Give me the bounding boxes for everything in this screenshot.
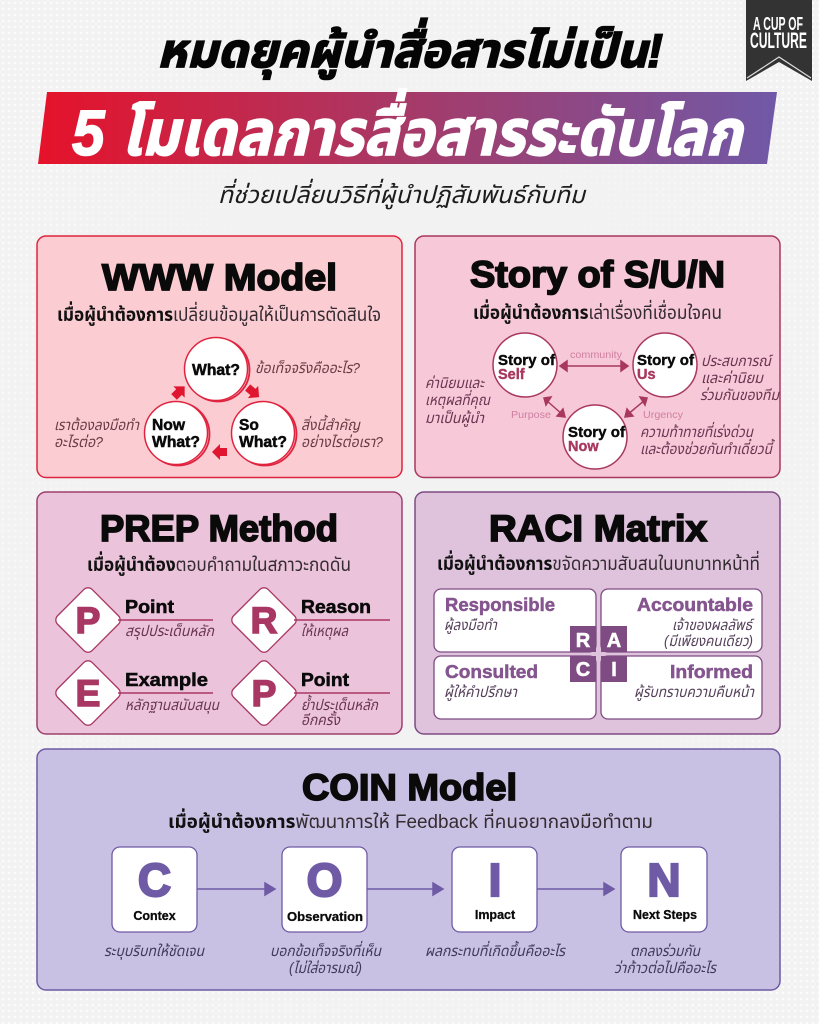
caption: observation: บอกข้อเท็จจริงที่เห็น (270, 940, 382, 960)
circle: Story of Now (563, 405, 627, 469)
caption: self (425, 375, 491, 427)
arrow: So What to Now What (212, 444, 227, 460)
caption: now what: อะไรต่อ? (54, 434, 104, 451)
RACI letter tiles (570, 626, 627, 682)
caption: observation (270, 940, 382, 977)
subheading: เมื่อผู้นำต้องตอบคำถามในสภาวะกดดัน (87, 551, 351, 576)
item: Point: P (76, 600, 100, 641)
caption: now what: เราต้องลงมือทำ (54, 417, 140, 434)
RACI letter tiles: I (611, 659, 617, 681)
arrow: I to N (537, 883, 614, 895)
item: Point again: ย้ำประเด็นหลัก (301, 694, 379, 714)
caption: now: และต้องช่วยกันทำเดี๋ยวนี้ (640, 438, 776, 458)
item: Point: สรุปประเด็นหลัก (125, 623, 215, 640)
heading: RACI Matrix: RACI Matrix (489, 508, 707, 549)
card: Impact: Impact (475, 908, 516, 922)
caption: us: ร่วมกันของทีม (700, 387, 781, 404)
caption: impact: ผลกระทบที่เกิดขึ้นคืออะไร (425, 940, 567, 960)
item: Reason (229, 585, 390, 655)
circle: Now What? (144, 402, 210, 466)
circle: So What?: What? (239, 434, 287, 451)
card: Impact: I (489, 854, 501, 906)
heading: PREP Method: PREP Method (100, 508, 338, 549)
box: Informed: Informed (670, 662, 753, 682)
subtitle: ที่ช่วยเปลี่ยนวิธีที่ผู้นำปฏิสัมพันธ์กับทีม (218, 178, 587, 210)
RACI letter tiles: A (607, 630, 621, 652)
item: Reason: R (251, 600, 277, 641)
caption: self: เหตุผลที่คุณ (425, 389, 491, 409)
subheading: เมื่อผู้นำต้องการขจัดความสับสนในบทบาทหน้าที่ (437, 550, 760, 575)
caption: next steps: ตกลงร่วมกัน (630, 943, 701, 960)
subheading: เมื่อผู้นำต้องการเล่าเรื่องที่เชื่อมใจคน (473, 299, 722, 324)
label: Purpose: Purpose (511, 409, 551, 421)
caption: now (640, 421, 776, 458)
circle: Now What?: Now (152, 417, 186, 434)
item: Reason: ให้เหตุผล (301, 623, 348, 640)
box: Responsible (434, 589, 596, 652)
card: Observation (282, 847, 367, 932)
subheading: เมื่อผู้นำต้องการเปลี่ยนข้อมูลให้เป็นการตัดสินใจ (57, 301, 381, 327)
box: Accountable: เจ้าของผลลัพธ์ (672, 617, 755, 634)
box: Informed: ผู้รับทราบความคืบหน้า (634, 684, 755, 701)
circle: Story of Self: Self (498, 367, 525, 383)
caption: us: ประสบการณ์ (701, 353, 774, 370)
caption: self: มาเป็นผู้นำ (425, 410, 485, 427)
circle: Story of Us: Us (637, 367, 656, 383)
arrow: Now What to What (168, 381, 190, 403)
arrow: urgency (625, 397, 647, 417)
circle: Story of Us (633, 333, 697, 397)
box: Consulted (434, 656, 596, 719)
label: community: community (570, 349, 623, 361)
panel: COIN Model (37, 749, 780, 990)
item: Point: Point (125, 597, 174, 617)
caption: so what (301, 414, 384, 451)
caption: what: ข้อเท็จจริงคืออะไร? (255, 360, 361, 377)
arrow: What to So What (242, 381, 264, 403)
item: Example (53, 658, 220, 728)
arrow: community (560, 361, 628, 371)
box: Responsible: Responsible (445, 595, 555, 615)
arrow: O to I (367, 883, 443, 895)
heading: COIN Model: COIN Model (302, 767, 517, 808)
arrow: purpose (544, 397, 565, 417)
caption: so what: อย่างไรต่อเรา? (301, 434, 384, 451)
caption: self: ค่านิยมและ (425, 375, 486, 392)
item: Reason: Reason (301, 597, 371, 617)
caption: us: และค่านิยม (701, 370, 765, 387)
item: Point (53, 585, 215, 655)
panel: Story of S/U/N (415, 236, 781, 478)
circle: What?: What? (192, 362, 240, 379)
circle: Story of Self (493, 333, 557, 397)
title: หมดยุคผู้นำสื่อสารไม่เป็น! (157, 18, 663, 80)
RACI letter tiles: R (576, 630, 591, 652)
caption: next steps: ว่าก้าวต่อไปคืออะไร (614, 960, 718, 977)
circle: Story of Us: Story of (637, 353, 694, 369)
item: Point again: อีกครั้ง (301, 710, 341, 729)
caption: observation: (ไม่ใส่อารมณ์) (289, 960, 362, 977)
card: Next Steps: Next Steps (633, 908, 697, 922)
item: Example: E (76, 673, 100, 714)
box: Accountable: (มีเพียงคนเดียว) (664, 633, 753, 650)
box: Consulted: Consulted (445, 662, 538, 682)
caption: so what: สิ่งนี้สำคัญ (301, 414, 361, 434)
card: Observation: O (307, 854, 342, 906)
circle: So What?: So (239, 417, 259, 434)
box: Consulted: ผู้ให้คำปรึกษา (444, 684, 518, 701)
caption: context: ระบุบริบทให้ชัดเจน (104, 943, 205, 960)
caption: next steps (614, 943, 718, 977)
card: Impact (452, 847, 537, 932)
item: Example: Example (125, 670, 208, 690)
caption: now: ความท้าทายที่เร่งด่วน (640, 421, 754, 441)
caption: now what (54, 417, 140, 451)
card: Contex: Contex (133, 909, 176, 923)
logo: A Cup of Culture (746, 0, 812, 81)
card: Contex (112, 847, 197, 932)
item: Point again: P (252, 673, 276, 714)
box: Responsible: ผู้ลงมือทำ (444, 617, 498, 634)
box: Accountable: Accountable (637, 595, 753, 615)
circle: Now What?: What? (152, 434, 200, 451)
heading: Story of S/U/N: Story of S/U/N (470, 254, 725, 295)
title banner: 5 โมเดลการสื่อสารระดับโลก (72, 88, 745, 169)
card: Observation: Observation (287, 910, 363, 924)
subheading: เมื่อผู้นำต้องการพัฒนาการให้ Feedback ที่คนอยากลงมือทำตาม (168, 808, 653, 833)
circle: What? (184, 338, 250, 402)
arrow: C to O (197, 883, 275, 895)
heading: WWW Model: WWW Model (102, 257, 337, 298)
circle: Story of Now: Story of (568, 425, 625, 441)
item: Example: หลักฐานสนับสนุน (125, 697, 220, 714)
circle: So What? (232, 402, 296, 466)
item: Point again: Point (301, 670, 349, 690)
box: Accountable (601, 589, 762, 652)
circle: Story of Self: Story of (498, 353, 555, 369)
panel: PREP Method (37, 492, 402, 734)
card: Contex: C (138, 854, 171, 906)
caption: us (700, 353, 781, 404)
card: Next Steps (621, 847, 707, 932)
label: Urgency: Urgency (643, 409, 684, 421)
panel: WWW Model (37, 236, 402, 478)
box: Informed (601, 656, 762, 719)
circle: Story of Now: Now (568, 439, 599, 455)
card: Next Steps: N (647, 854, 681, 906)
panel: RACI Matrix (415, 492, 780, 734)
item: Point again (229, 658, 390, 729)
RACI letter tiles: C (576, 659, 590, 681)
